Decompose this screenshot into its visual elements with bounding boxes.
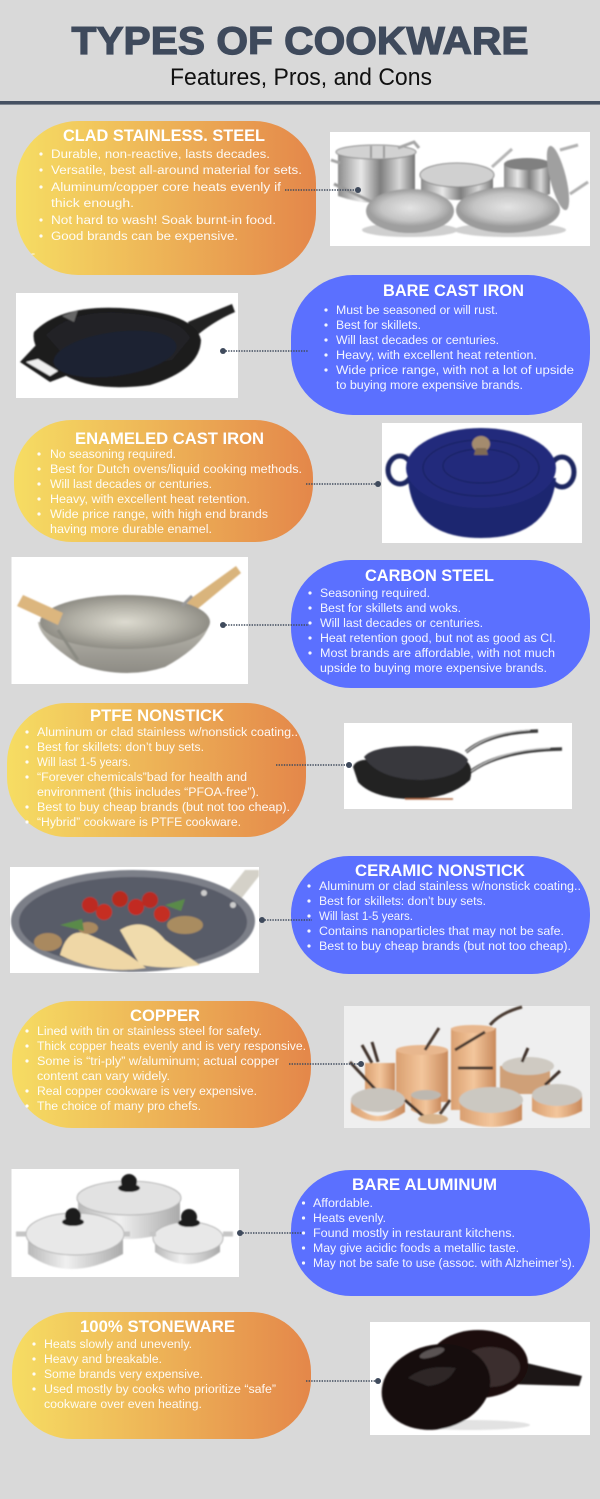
panel: 100% stoneware [12, 1312, 311, 1439]
bullet list: enameled cast iron: Heavy, with excellent heat retention. [50, 492, 250, 506]
panel: copper [12, 1001, 311, 1128]
heading: copper: COPPER [130, 1007, 200, 1025]
bullet list: bare aluminum [302, 1196, 575, 1270]
bullet list: carbon steel: Most brands are affordable, with not much [320, 646, 555, 660]
bullet list: carbon steel: Best for skillets and woks. [320, 601, 461, 615]
bullet list: clad stainless steel: Versatile, best all-around material for sets. [51, 163, 302, 177]
bullet list: 100% stoneware: Some brands very expensive. [44, 1367, 203, 1381]
bullet list: bare cast iron: to buying more expensive brands. [336, 378, 523, 392]
connector: PTFE [276, 762, 352, 768]
connector: aluminum [237, 1230, 302, 1236]
image: carbon steel wok [12, 557, 248, 684]
image: copper cookware set [344, 1006, 590, 1128]
bullet list: bare cast iron [324, 303, 574, 392]
heading: bare cast iron: BARE CAST IRON [383, 282, 524, 300]
bullet list: PTFE nonstick: “Forever chemicals”bad for health and [37, 770, 247, 784]
connector: stoneware [306, 1378, 381, 1384]
bullet list: ceramic nonstick: Contains nanoparticles that may not be safe. [319, 924, 564, 938]
bullet list: clad stainless steel: Not hard to wash! Soak burnt-in food. [51, 213, 276, 227]
bullet list: PTFE nonstick: “Hybrid” cookware is PTFE cookware. [37, 815, 241, 829]
bullet list: bare aluminum: Found mostly in restaurant kitchens. [313, 1226, 515, 1240]
bullet list: ceramic nonstick: Aluminum or clad stainless w/nonstick coating.. [319, 879, 581, 893]
heading: enameled cast iron: ENAMELED CAST IRON [75, 430, 264, 448]
heading: bare aluminum: BARE ALUMINUM [352, 1176, 497, 1194]
panel: enameled cast iron [14, 420, 313, 542]
bullet list: PTFE nonstick: Aluminum or clad stainless w/nonstick coating.. [37, 725, 298, 739]
image: stainless steel cookware set [330, 132, 590, 246]
bullet list: clad stainless steel: thick enough. [51, 196, 134, 210]
bullet list: copper: The choice of many pro chefs. [37, 1099, 201, 1113]
connector: carbon steel [220, 622, 309, 628]
bullet list: bare cast iron: Must be seasoned or will rust. [336, 303, 498, 317]
subtitle: Features, Pros, and Cons [170, 64, 432, 91]
bullet list: enameled cast iron: having more durable enamel. [50, 522, 212, 536]
bullet list: bare cast iron: Best for skillets. [336, 318, 421, 332]
bullet list: copper: Lined with tin or stainless steel for safety. [37, 1024, 262, 1038]
connector: stainless [285, 187, 361, 193]
bullet list: carbon steel: Will last decades or centuries. [320, 616, 483, 630]
bullet list: clad stainless steel: - [31, 246, 35, 260]
bullet list: bare aluminum: May not be safe to use (assoc. with Alzheimer’s). [313, 1256, 575, 1270]
bullet list: carbon steel: Seasoning required. [320, 586, 430, 600]
bullet list: 100% stoneware: Heats slowly and unevenly. [44, 1337, 192, 1351]
bullet list: PTFE nonstick [25, 725, 298, 829]
panel: bare aluminum [291, 1170, 590, 1296]
bullet list: bare aluminum: May give acidic foods a metallic taste. [313, 1241, 519, 1255]
bullet list: PTFE nonstick: Will last 1-5 years. [37, 755, 131, 769]
bullet list: copper [25, 1024, 306, 1113]
bullet list: clad stainless steel [31, 147, 302, 260]
bullet list: clad stainless steel: Durable, non-reactive, lasts decades. [51, 147, 270, 161]
image: PTFE nonstick pans [344, 723, 572, 809]
heading: 100% stoneware: 100% STONEWARE [80, 1318, 235, 1336]
bullet list: enameled cast iron [37, 447, 302, 536]
bullet list: bare cast iron: Wide price range, with not a lot of upside [336, 363, 574, 377]
panel: bare cast iron [291, 275, 590, 415]
bullet list: PTFE nonstick: Best for skillets: don’t buy sets. [37, 740, 204, 754]
heading: ceramic nonstick: CERAMIC NONSTICK [355, 862, 525, 880]
bullet list: 100% stoneware: Heavy and breakable. [44, 1352, 162, 1366]
connector: ceramic [259, 917, 312, 923]
panel: PTFE nonstick [7, 703, 306, 837]
bullet list: enameled cast iron: No seasoning required. [50, 447, 176, 461]
image: ceramic nonstick pan with food [10, 867, 259, 973]
bullet list: carbon steel: Heat retention good, but not as good as CI. [320, 631, 556, 645]
connector: enameled [306, 481, 381, 487]
bullet list: bare cast iron: Will last decades or centuries. [336, 333, 499, 347]
bullet list: carbon steel: upside to buying more expensive brands. [320, 661, 547, 675]
bullet list: enameled cast iron: Will last decades or centuries. [50, 477, 212, 491]
bullet list: clad stainless steel: Good brands can be expensive. [51, 229, 238, 243]
bullet list: bare aluminum: Heats evenly. [313, 1211, 386, 1225]
bullet list: enameled cast iron: Wide price range, with high end brands [50, 507, 268, 521]
connector: copper [289, 1061, 364, 1067]
heading: carbon steel: CARBON STEEL [365, 567, 494, 585]
bullet list: copper: content can vary widely. [37, 1069, 170, 1083]
bullet list: PTFE nonstick: environment (this includes “PFOA-free”). [37, 785, 259, 799]
bullet list: PTFE nonstick: Best to buy cheap brands (but not too cheap). [37, 800, 290, 814]
connectors [220, 187, 381, 1384]
image: black stoneware pan and lid [370, 1322, 590, 1441]
bullet list: copper: Some is “tri-ply” w/aluminum; actual copper [37, 1054, 279, 1068]
bullet list: copper: Thick copper heats evenly and is very responsive. [37, 1039, 306, 1053]
heading: clad stainless steel: CLAD STAINLESS. STEEL [63, 127, 265, 145]
bullet list: clad stainless steel: Aluminum/copper core heats evenly if [51, 180, 282, 194]
panel: ceramic nonstick [291, 856, 590, 974]
bullet list: ceramic nonstick: Will last 1-5 years. [319, 909, 413, 923]
bullet list: ceramic nonstick: Best for skillets: don’t buy sets. [319, 894, 486, 908]
bullet list: bare aluminum: Affordable. [313, 1196, 373, 1210]
bullet list: bare cast iron: Heavy, with excellent heat retention. [336, 348, 537, 362]
bullet list: 100% stoneware: cookware over even heating. [44, 1397, 202, 1411]
image: bare aluminum pots [12, 1169, 239, 1277]
connector: cast iron [220, 348, 308, 354]
bullet list: 100% stoneware: Used mostly by cooks who prioritize “safe” [44, 1382, 276, 1396]
bullet list: ceramic nonstick: Best to buy cheap brands (but not too cheap). [319, 939, 571, 953]
title: TYPES OF COOKWARE [72, 20, 528, 63]
bullet list: enameled cast iron: Best for Dutch ovens/liquid cooking methods. [50, 462, 302, 476]
bullet list: copper: Real copper cookware is very expensive. [37, 1084, 257, 1098]
panel: clad stainless steel [16, 121, 316, 275]
image: enameled dutch oven [382, 423, 582, 543]
image: cast iron skillet [16, 293, 238, 398]
bullet list: ceramic nonstick [307, 879, 581, 953]
heading: PTFE nonstick: PTFE NONSTICK [90, 707, 224, 725]
bullet list: carbon steel [308, 586, 556, 675]
bullet list: 100% stoneware [32, 1337, 276, 1411]
panel: carbon steel [291, 560, 590, 688]
